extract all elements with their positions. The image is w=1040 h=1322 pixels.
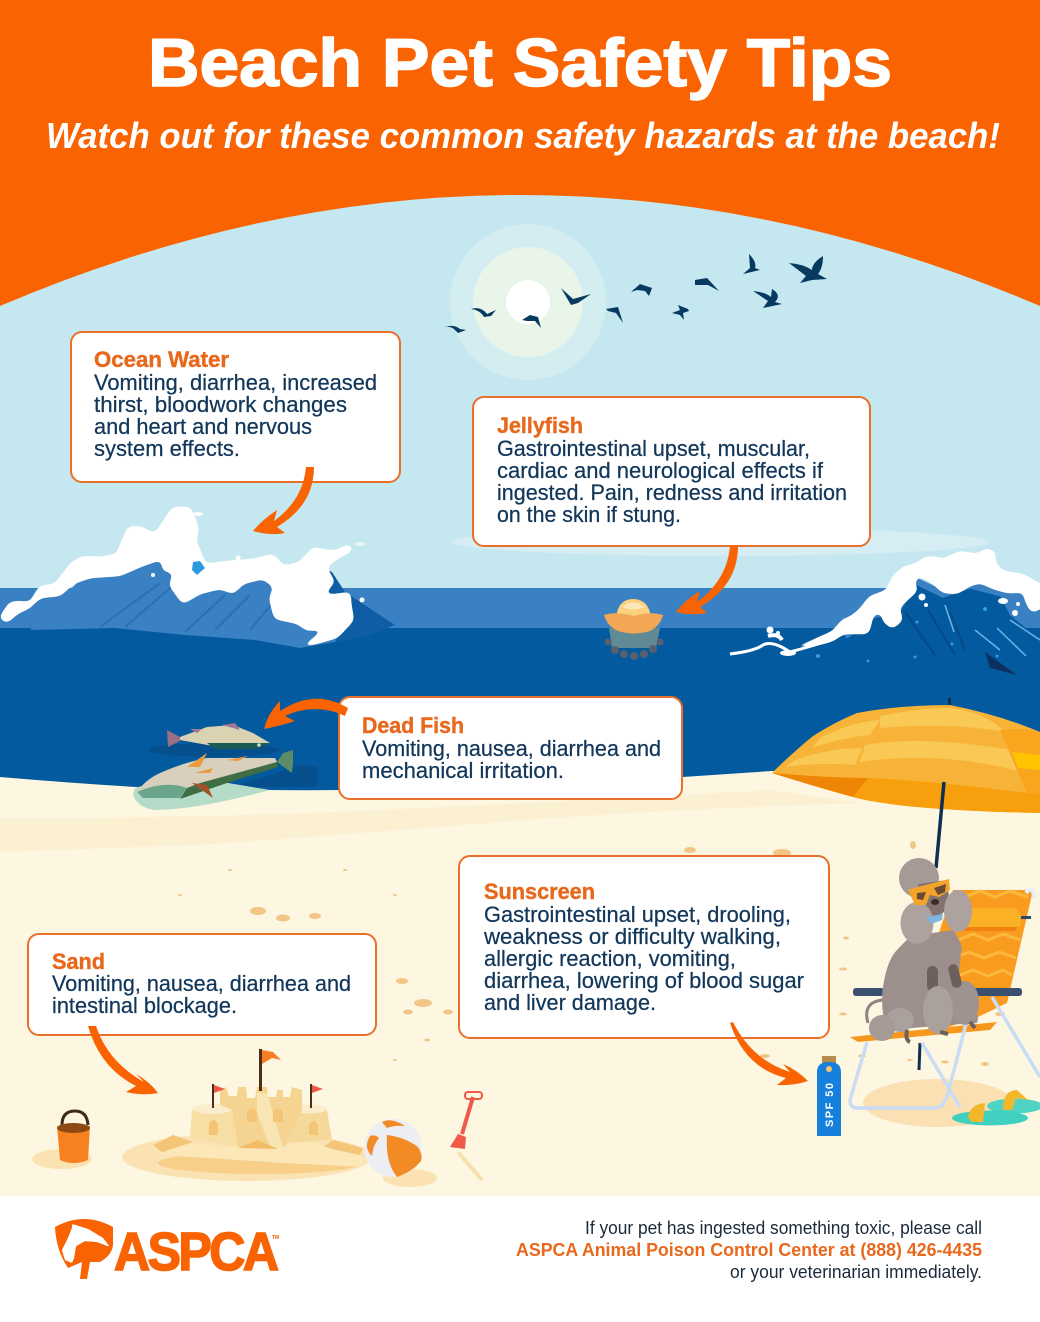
card: Sunscreen: allergic reaction, vomiting, xyxy=(484,946,736,971)
card: Jellyfish: cardiac and neurological effects if xyxy=(497,458,824,483)
right wave xyxy=(730,549,1040,680)
arrow: sand xyxy=(88,1026,158,1094)
deep sea xyxy=(0,628,1040,808)
arrow: sunscreen xyxy=(730,1022,808,1085)
arrow: dead fish xyxy=(264,699,348,729)
flip-flops xyxy=(952,1090,1040,1126)
card: Ocean Water: and heart and nervous xyxy=(94,414,312,439)
poison control notice: ASPCA Animal Poison Control Center at (888) 426-4435 xyxy=(516,1240,982,1260)
sky background xyxy=(0,0,1040,600)
card: Dead Fish: Vomiting, nausea, diarrhea and xyxy=(362,736,661,761)
orange bucket xyxy=(32,1111,92,1169)
orange header xyxy=(0,0,1040,306)
card: Sunscreen xyxy=(459,856,829,1038)
card: Sunscreen: Gastrointestinal upset, drooling, xyxy=(484,902,791,927)
subtitle: Watch out for these common safety hazards at the beach! xyxy=(46,115,1000,156)
soft cloud behind jellyfish card xyxy=(452,528,988,556)
sandcastle xyxy=(122,1049,372,1181)
umbrella pole xyxy=(919,782,944,1070)
footer xyxy=(0,1196,1040,1322)
card: Sand: Vomiting, nausea, diarrhea and xyxy=(52,971,351,996)
title: Beach Pet Safety Tips xyxy=(148,25,892,101)
beach chair xyxy=(850,889,1040,1108)
card: Jellyfish: ingested. Pain, redness and irritation xyxy=(497,480,847,505)
card: Sand xyxy=(28,934,376,1035)
card: Jellyfish xyxy=(473,397,870,546)
beach ball xyxy=(364,1119,437,1187)
card: Sand: intestinal blockage. xyxy=(52,993,237,1018)
card: Dead Fish: mechanical irritation. xyxy=(362,758,564,783)
card: Ocean Water: Vomiting, diarrhea, increased xyxy=(94,370,377,395)
left wave xyxy=(0,508,395,648)
poodle with sunglasses xyxy=(867,858,979,1042)
card: Jellyfish: Gastrointestinal upset, muscular, xyxy=(497,436,810,461)
sunscreen bottle: SPF 50 xyxy=(824,1083,836,1127)
card: Sunscreen: diarrhea, lowering of blood sugar xyxy=(484,968,804,993)
card: Sunscreen: weakness or difficulty walking, xyxy=(483,924,781,949)
poison control notice xyxy=(516,1218,982,1282)
card: Ocean Water: thirst, bloodwork changes xyxy=(94,392,347,417)
red shovel xyxy=(450,1092,482,1180)
card: Sunscreen: Sunscreen xyxy=(484,879,595,904)
card: Dead Fish xyxy=(339,697,682,799)
shadow under chair xyxy=(863,1079,1013,1127)
card: Sand: Sand xyxy=(52,949,105,974)
card: Jellyfish: Jellyfish xyxy=(497,413,583,438)
sunscreen bottle xyxy=(817,1056,841,1136)
logo: ASPCA: TM xyxy=(272,1235,279,1241)
logo: ASPCA: ASPCA xyxy=(114,1222,279,1282)
card: Sunscreen: and liver damage. xyxy=(484,990,656,1015)
card: Dead Fish: Dead Fish xyxy=(362,713,464,738)
card: Ocean Water xyxy=(71,332,400,482)
card: Ocean Water: Ocean Water xyxy=(94,347,229,372)
sun xyxy=(450,224,606,380)
jellyfish xyxy=(604,599,664,660)
dead fish xyxy=(133,723,317,810)
poison control notice: or your veterinarian immediately. xyxy=(730,1262,982,1282)
flock of birds xyxy=(445,254,827,333)
sand beach xyxy=(0,771,1040,1196)
card: Jellyfish: on the skin if stung. xyxy=(497,502,681,527)
card: Ocean Water: system effects. xyxy=(94,436,240,461)
arrow: ocean water xyxy=(253,467,314,534)
beach umbrella xyxy=(772,698,1040,813)
poison control notice: If your pet has ingested something toxic, please call xyxy=(585,1218,982,1238)
arrow: jellyfish xyxy=(676,546,738,614)
logo: ASPCA xyxy=(55,1219,279,1282)
far sea band xyxy=(0,588,1040,629)
sand speckles xyxy=(178,841,1005,1066)
